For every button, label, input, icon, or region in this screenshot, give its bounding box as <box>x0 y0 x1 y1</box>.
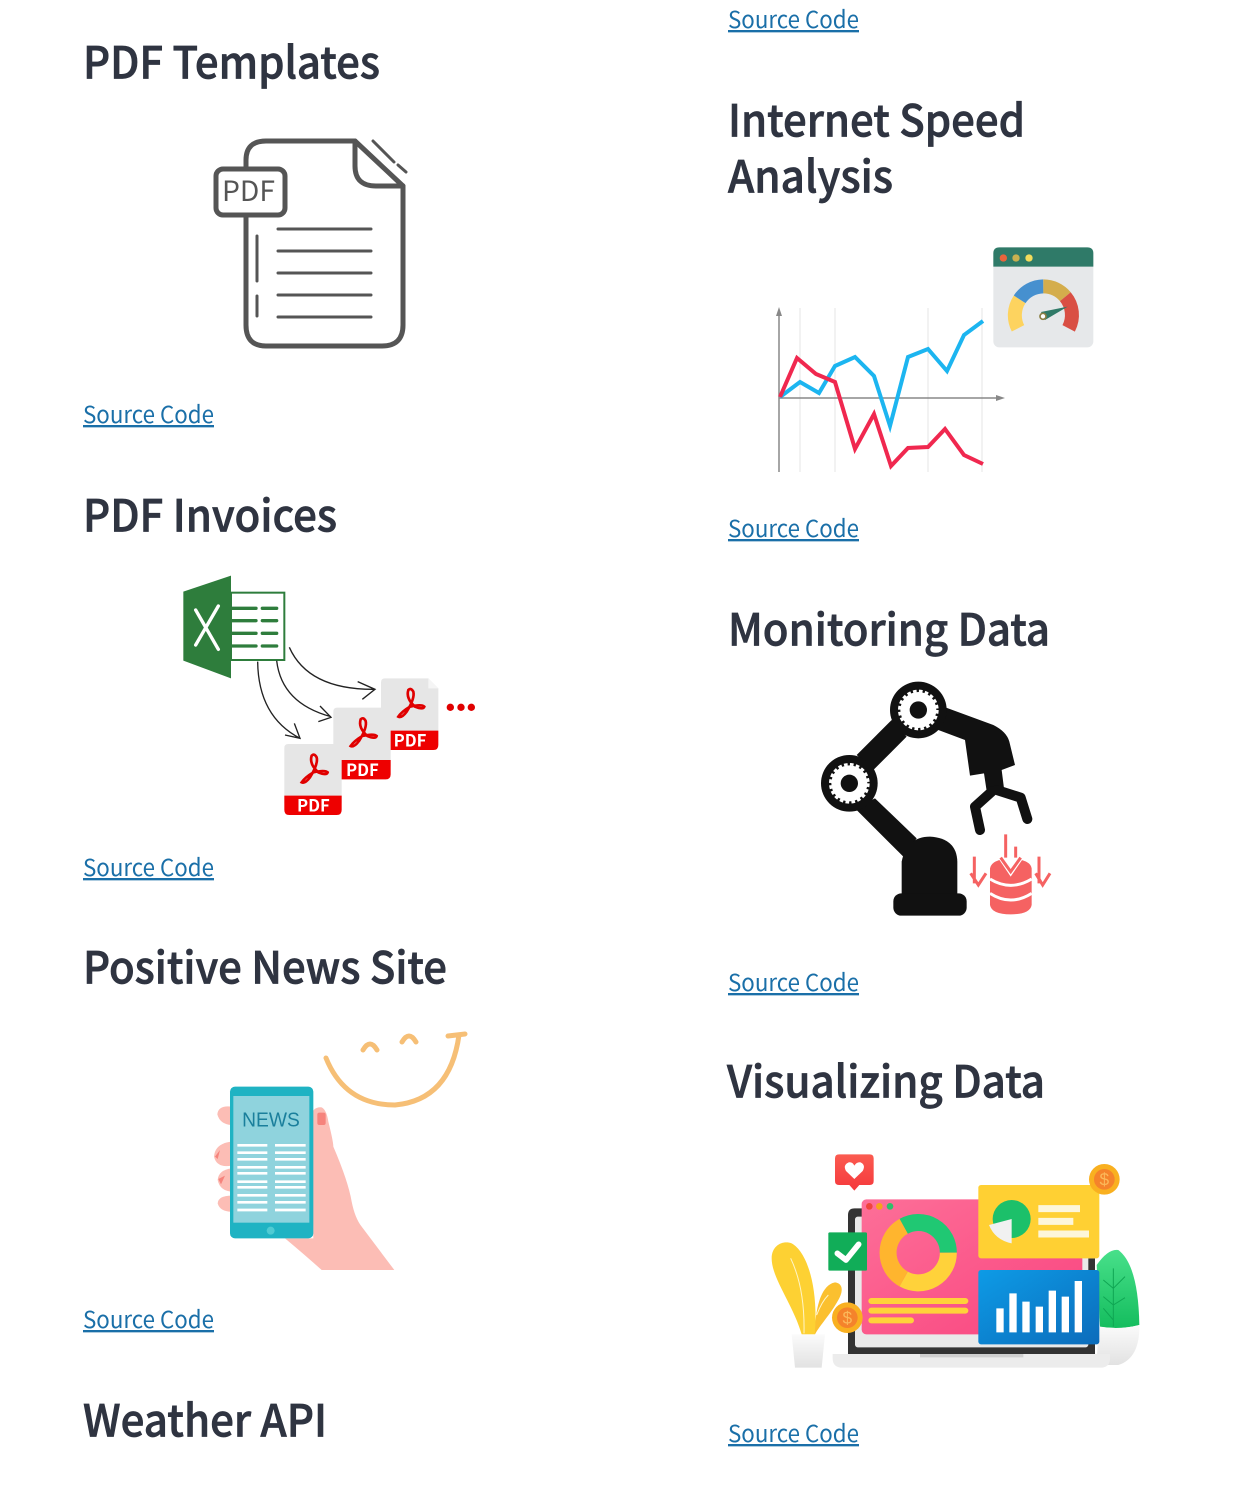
chart: speed line chart with gauge <box>776 247 1093 472</box>
icon: PDF document: PDF <box>222 170 275 210</box>
link: source code: Source Code <box>83 849 214 883</box>
icon: Excel to PDF invoices <box>183 576 475 817</box>
link: source code: Source Code <box>83 1301 214 1335</box>
heading: Internet Speed Analysis: Internet Speed <box>728 86 1025 150</box>
heading: PDF Templates: PDF Templates <box>83 28 380 92</box>
illustration: data dashboard laptop: $ <box>843 1308 853 1328</box>
heading: PDF Invoices: PDF Invoices <box>83 480 337 544</box>
link: source code: Source Code <box>728 510 859 544</box>
link: source code: Source Code <box>728 1415 859 1449</box>
heading: Internet Speed Analysis: Analysis <box>728 142 893 206</box>
icon: Excel to PDF invoices: PDF <box>297 793 330 817</box>
link: source code top right: Source Code <box>728 1 859 35</box>
icon: Excel to PDF invoices: PDF <box>346 757 379 781</box>
icon: Excel to PDF invoices: PDF <box>394 728 427 752</box>
heading: Monitoring Data: Monitoring Data <box>728 594 1050 658</box>
illustration: data dashboard laptop <box>772 1154 1139 1368</box>
icon: phone with news and smile <box>214 1034 465 1270</box>
heading: Weather API: Weather API <box>83 1386 327 1450</box>
icon: PDF document <box>216 141 406 346</box>
illustration: data dashboard laptop: $ <box>1100 1170 1110 1190</box>
link: source code: Source Code <box>83 396 214 430</box>
icon: robot arm with database <box>821 682 1050 916</box>
heading: Internet Speed Analysis <box>728 86 1025 206</box>
heading: Visualizing Data: Visualizing Data <box>726 1046 1045 1110</box>
heading: Positive News Site: Positive News Site <box>83 932 447 996</box>
icon: phone with news and smile: NEWS <box>242 1109 300 1132</box>
link: source code: Source Code <box>728 964 859 998</box>
